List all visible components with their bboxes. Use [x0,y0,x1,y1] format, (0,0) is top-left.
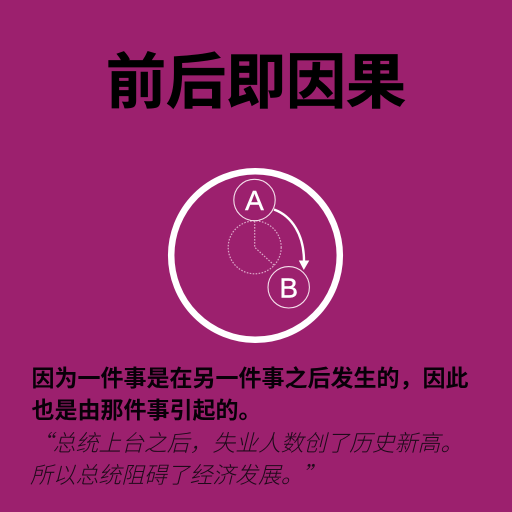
definition text: 因为一件事是在另一件事之后发生的，因此 [32,365,468,391]
example quote [30,425,463,490]
definition text [32,365,468,423]
title: 前后即因果 [106,49,406,116]
definition text: 也是由那件事引起的。 [32,397,262,423]
example quote: “总统上台之后，失业人数创了历史新高。 [30,425,463,458]
circle B: B [279,272,298,303]
circle B [268,267,309,308]
dotted clock [228,221,281,274]
arrow from A to B [274,210,309,270]
example quote: 所以总统阻碍了经济发展。 ” [30,456,325,490]
circle A: A [245,185,264,216]
large white ring [171,171,340,340]
circle A [234,179,275,221]
